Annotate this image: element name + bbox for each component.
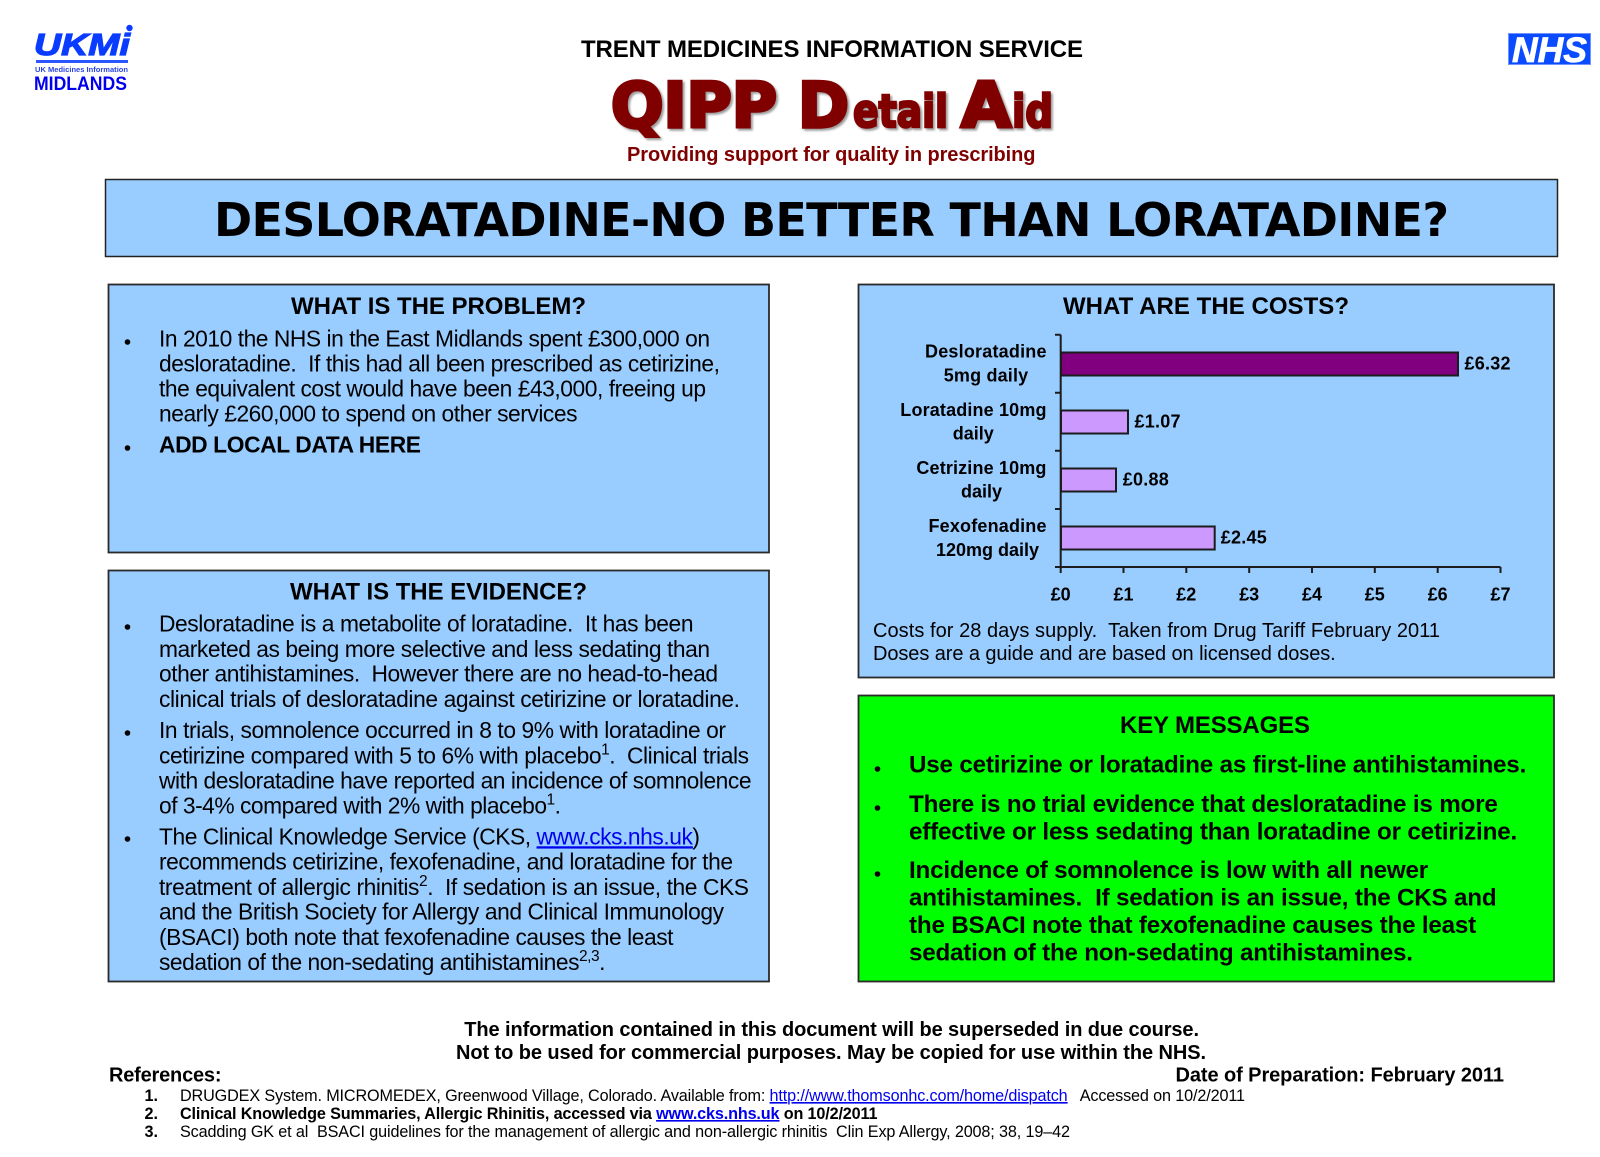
text block: problem bullets: the equivalent cost would have been £43,000, freeing up [159,375,706,401]
references list: 1. [144,1087,158,1105]
text block: problem bullets: In 2010 the NHS in the East Midlands spent £300,000 on [159,325,710,351]
panel: key messages [858,696,1554,982]
text block: key message bullets: the BSACI note that fexofenadine causes the least [909,912,1476,939]
references list: Scadding GK et al BSACI guidelines for the management of allergic and non-allergic rhinitis Clin Exp Allergy, 2008; 38, 19–42 [180,1123,1070,1141]
logo: NHS: NHS [1512,31,1587,70]
references list: 2. [144,1105,158,1123]
text block: key message bullets: antihistamines. If sedation is an issue, the CKS and [909,885,1497,912]
category labels: 5mg daily [944,366,1028,386]
references list: 3. [144,1123,158,1141]
text block: evidence bullets: of 3-4% compared with 2% with placebo [159,792,547,818]
text block: evidence bullets: sedation of the non-sedating antihistamines [159,949,579,975]
text block: evidence bullets: and the British Society for Allergy and Clinical Immunology [159,899,725,925]
text block: key message bullets: There is no trial evidence that desloratadine is more [909,791,1498,818]
text block: problem bullets: ADD LOCAL DATA HERE [159,431,421,457]
logo: UKMi Midlands [34,25,133,95]
logo: UKMi Midlands: MIDLANDS [34,74,127,95]
bar: fexofenadine £2.45: £2.45 [1221,527,1267,547]
panel: what is the evidence [108,570,769,982]
footer: disclaimer: The information contained in this document will be superseded in due course. [464,1019,1199,1041]
text block: evidence bullets: Desloratadine is a metabolite of loratadine. It has been [159,611,694,637]
chart caption [873,620,1440,665]
header: service name: TRENT MEDICINES INFORMATION SERVICE [581,36,1083,63]
text block: evidence bullets: (BSACI) both note that fexofenadine causes the least [159,924,674,950]
heading: key messages: KEY MESSAGES [1120,712,1310,739]
bar: fexofenadine £2.45 [1061,526,1267,550]
bar: cetirizine £0.88 [1061,468,1169,492]
text block: evidence bullets: clinical trials of desloratadine against cetirizine or loratadine. [159,686,740,712]
heading: evidence: WHAT IS THE EVIDENCE? [290,578,587,606]
bar chart: 28-day cost by drug [900,335,1510,605]
chart caption: Costs for 28 days supply. Taken from Drug Tariff February 2011 [873,620,1440,642]
x axis labels: £1 [1114,585,1134,605]
text block: evidence bullets: . [599,949,606,975]
references list: Clinical Knowledge Summaries, Allergic Rhinitis, accessed via www.cks.nhs.uk on 10/2/2011 [180,1105,878,1123]
category labels: Cetrizine 10mg [916,458,1046,478]
chart caption: Doses are a guide and are based on licensed doses. [873,643,1336,665]
text block: evidence bullets: 1 [547,791,555,808]
category labels: 120mg daily [936,540,1039,560]
x axis labels [1051,585,1510,605]
footer: disclaimer: Not to be used for commercial purposes. May be copied for use within the NHS. [456,1042,1206,1064]
text block: key message bullets: sedation of the non-sedating antihistamines. [909,940,1413,967]
header: QIPP Detail Aid wordmark: A [961,69,1011,142]
text block: evidence bullets: . [555,792,561,818]
text block: evidence bullets: treatment of allergic rhinitis [159,874,419,900]
text block: problem bullets [125,325,720,457]
text block: evidence bullets: In trials, somnolence occurred in 8 to 9% with loratadine or [159,717,726,743]
category labels: daily [961,482,1002,502]
x axis labels: £7 [1490,585,1510,605]
bar: loratadine £1.07: £1.07 [1134,411,1180,431]
text block: evidence bullets: cetirizine compared with 5 to 6% with placebo [159,742,602,768]
x axis labels: £0 [1051,585,1071,605]
text block: key message bullets [875,752,1526,967]
x axis labels: £2 [1176,585,1196,605]
x axis labels: £6 [1428,585,1448,605]
title banner [106,180,1558,256]
header: QIPP Detail Aid wordmark: etail [853,85,948,138]
panel: what are the costs [858,284,1554,678]
category labels: Desloratadine [925,342,1046,362]
text block: evidence bullets: 1 [601,741,610,758]
header: QIPP Detail Aid wordmark [611,69,1053,142]
text block: evidence bullets: 2 [419,873,428,890]
panel: what is the problem [108,284,769,552]
header: QIPP Detail Aid wordmark: QIPP [611,69,777,142]
bar: loratadine £1.07 [1061,410,1180,434]
logo: UKMi Midlands: UKMi [34,27,132,62]
heading: costs: WHAT ARE THE COSTS? [1063,293,1349,320]
text block: key message bullets: effective or less sedating than loratadine or cetirizine. [909,818,1517,845]
category labels: daily [953,423,994,443]
header: tagline: Providing support for quality in prescribing [627,144,1036,166]
text block: evidence bullets: . If sedation is an issue, the CKS [427,874,749,900]
text block: evidence bullets: 2,3 [579,948,600,965]
text block: evidence bullets: marketed as being more selective and less sedating than [159,636,710,662]
header: QIPP Detail Aid wordmark: D [798,69,849,142]
references list: DRUGDEX System. MICROMEDEX, Greenwood Village, Colorado. Available from: http://www.thomsonhc.com/home/dispatch Accessed on 10/2/2011 [180,1087,1245,1105]
x axis labels: £4 [1302,585,1322,605]
references heading: References: [109,1064,222,1086]
category labels: Loratadine 10mg [900,400,1046,420]
text block: key message bullets: Use cetirizine or loratadine as first-line antihistamines. [909,752,1526,779]
category labels [900,342,1046,560]
text block: evidence bullets: with desloratadine have reported an incidence of somnolence [158,767,752,793]
header: QIPP Detail Aid wordmark: id [1012,85,1053,138]
text block: evidence bullets [125,611,751,975]
bar: desloratadine £6.32: £6.32 [1464,353,1510,373]
text block: evidence bullets: recommends cetirizine, fexofenadine, and loratadine for the [159,848,733,874]
title banner: DESLORATADINE-NO BETTER THAN LORATADINE? [214,193,1449,247]
footer: disclaimer [456,1019,1206,1064]
heading: problem: WHAT IS THE PROBLEM? [291,293,586,320]
text block: problem bullets: desloratadine. If this had all been prescribed as cetirizine, [159,350,720,376]
category labels: Fexofenadine [928,516,1046,536]
text block: evidence bullets: other antihistamines. However there are no head-to-head [159,661,718,687]
references list [144,1087,1245,1141]
logo: UKMi Midlands: UK Medicines Information [35,65,128,74]
x axis labels: £3 [1239,585,1259,605]
text block: problem bullets: nearly £260,000 to spend on other services [159,400,578,426]
text block: evidence bullets: . Clinical trials [609,742,749,768]
bar: desloratadine £6.32 [1061,352,1510,376]
text block: key message bullets: Incidence of somnolence is low with all newer [909,857,1429,884]
bar: cetirizine £0.88: £0.88 [1123,470,1169,490]
date of preparation: Date of Preparation: February 2011 [1176,1064,1504,1086]
text block: evidence bullets: The Clinical Knowledge Service (CKS, www.cks.nhs.uk) [159,823,700,849]
x axis labels: £5 [1365,585,1385,605]
